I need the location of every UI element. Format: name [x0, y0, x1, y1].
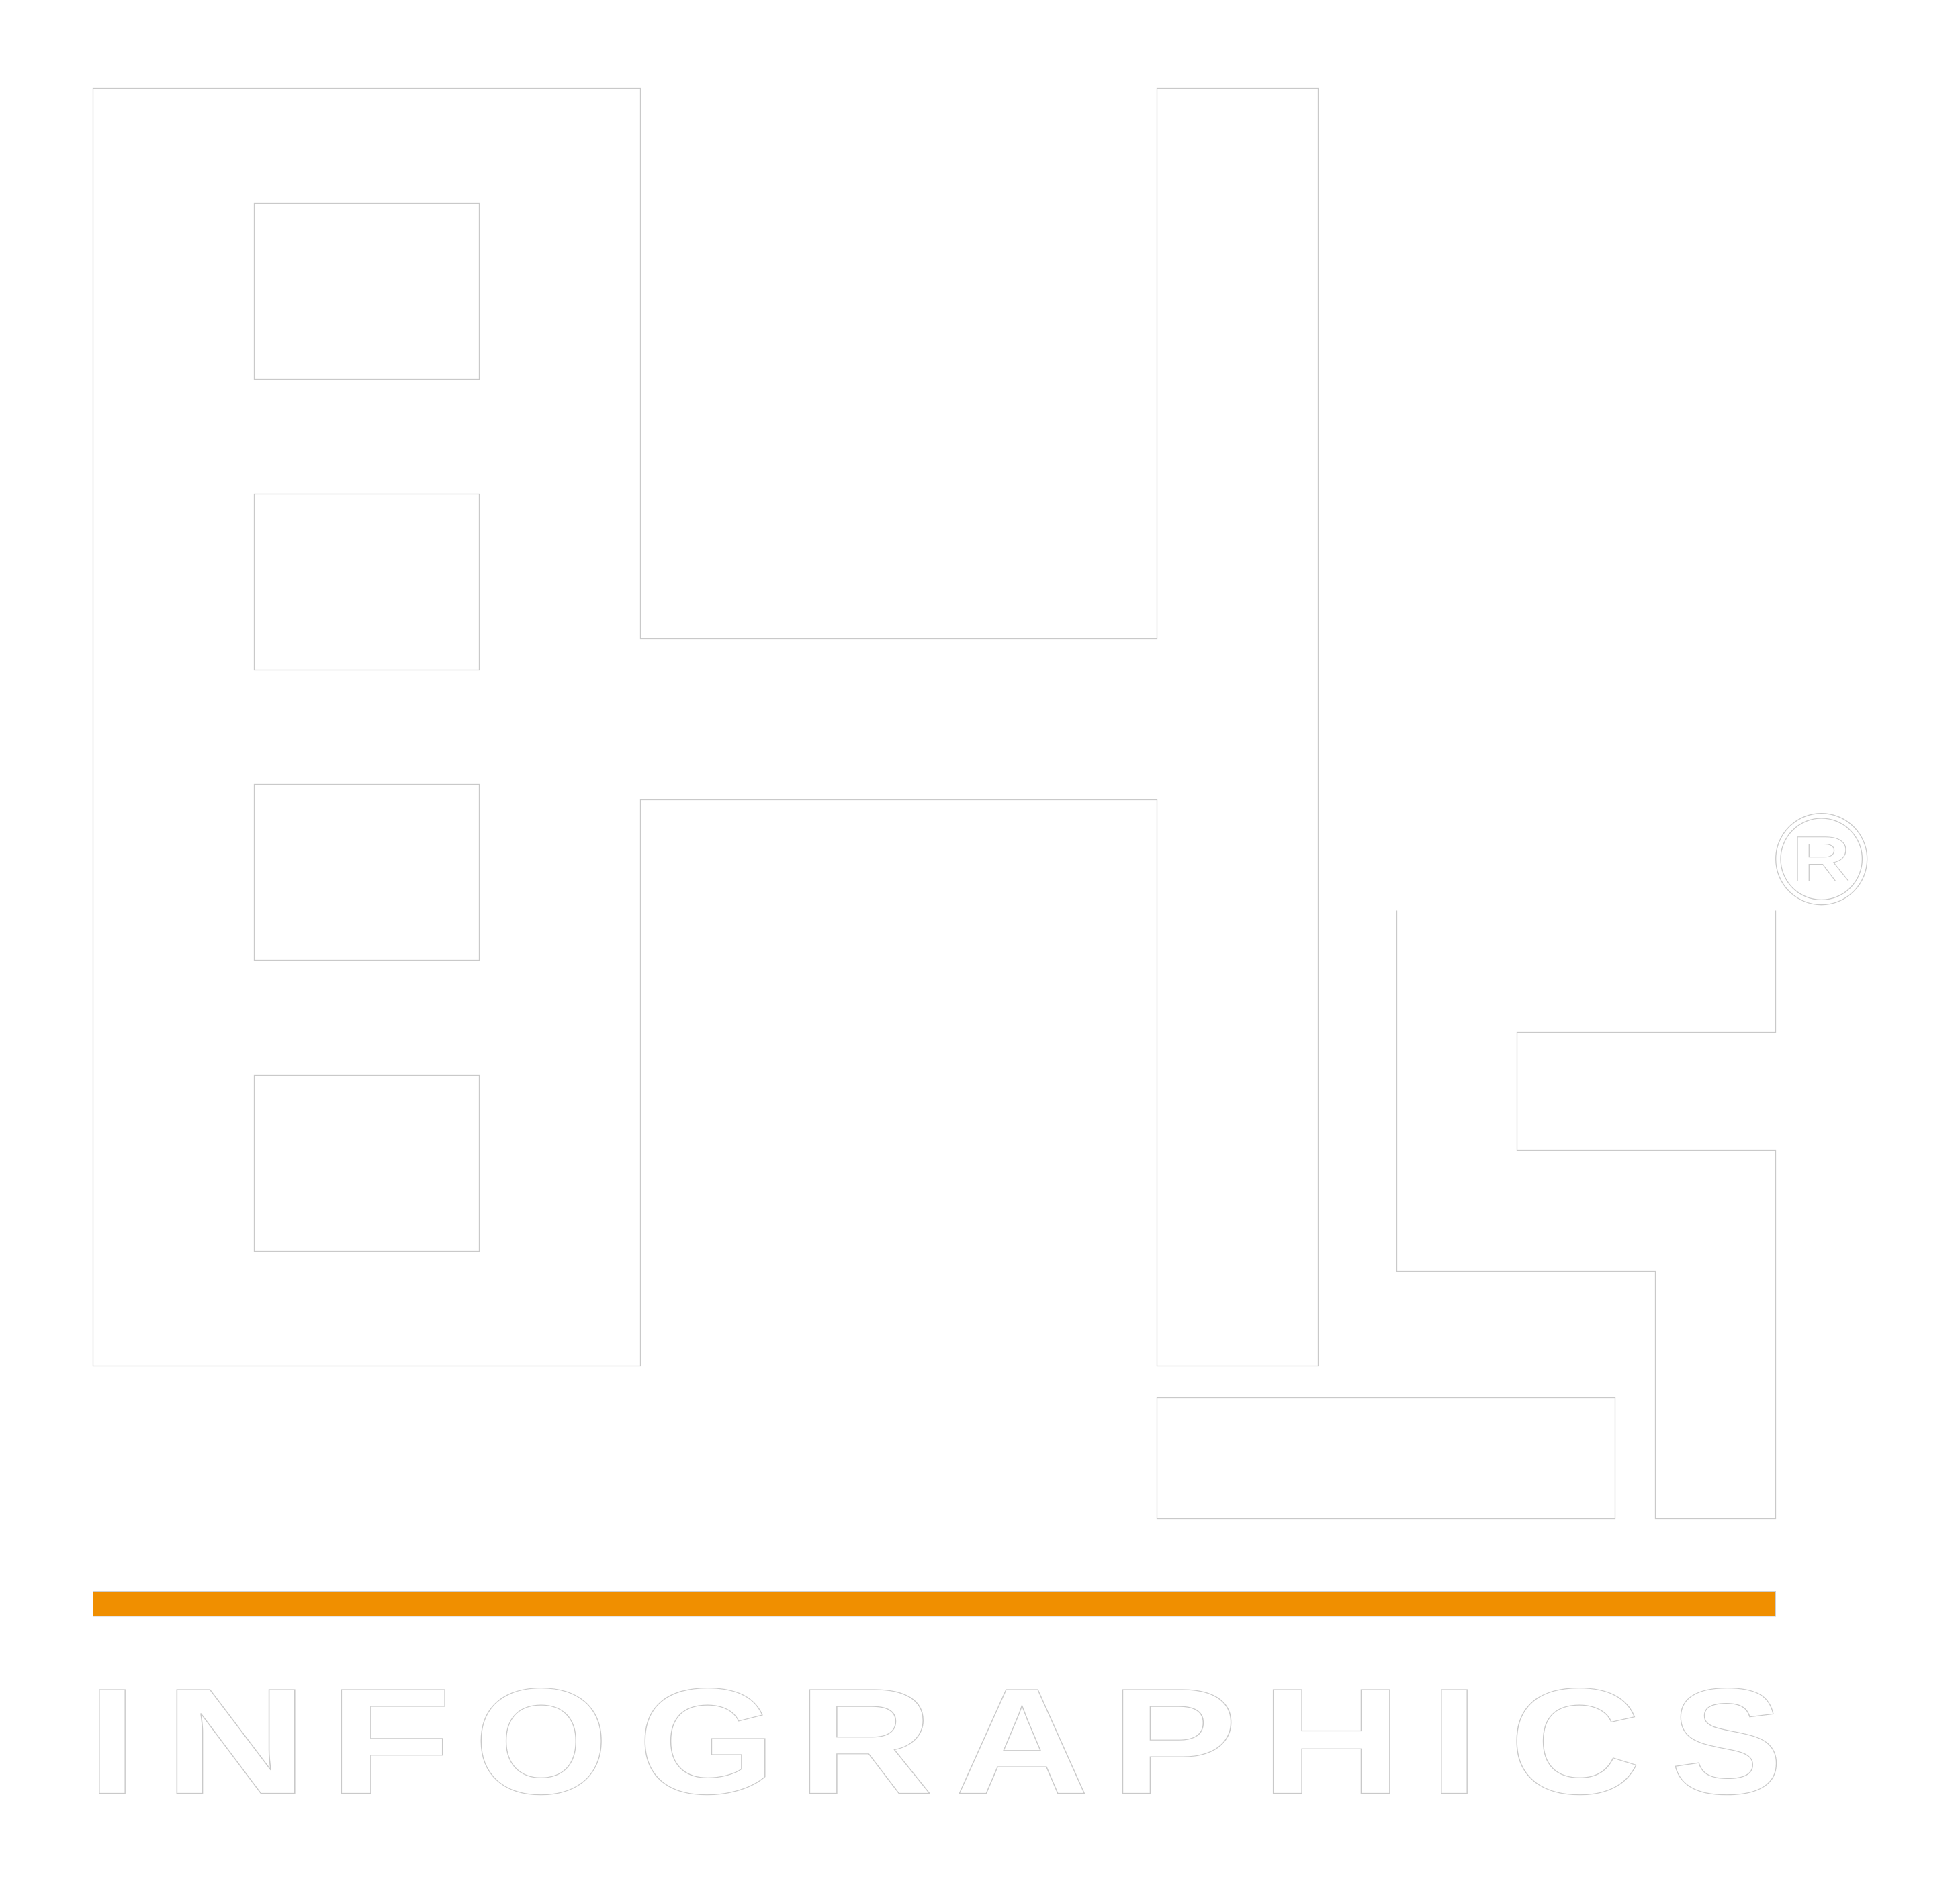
wordmark: INFOGRAPHICS: G — [637, 1657, 776, 1826]
registered mark — [1776, 814, 1867, 905]
wordmark: INFOGRAPHICS: N — [163, 1657, 308, 1826]
wordmark: INFOGRAPHICS: F — [328, 1657, 452, 1826]
wordmark: INFOGRAPHICS: R — [797, 1657, 934, 1826]
logo mark: monogram and registered symbol — [93, 89, 1867, 1518]
wordmark: INFOGRAPHICS: O — [474, 1657, 609, 1826]
wordmark: INFOGRAPHICS: A — [955, 1657, 1089, 1826]
letter S shape, open at top — [1397, 911, 1776, 1518]
orange divider bar — [93, 1592, 1776, 1616]
B window 2 — [254, 494, 480, 670]
wordmark: INFOGRAPHICS: I — [87, 1657, 137, 1826]
wordmark: INFOGRAPHICS: P — [1110, 1657, 1237, 1826]
letter B joined to H: outline — [93, 89, 1318, 1366]
wordmark: INFOGRAPHICS: S — [1671, 1657, 1783, 1826]
B window 3 — [254, 785, 480, 961]
wordmark: INFOGRAPHICS: H — [1260, 1657, 1403, 1826]
B window 1 — [254, 203, 480, 379]
wordmark: INFOGRAPHICS: C — [1509, 1657, 1641, 1826]
registered mark: letter R: R — [1792, 824, 1850, 895]
registered mark: outer ring — [1776, 814, 1867, 905]
B window 4 — [254, 1075, 480, 1251]
registered mark: inner ring — [1781, 818, 1862, 900]
underscore block below H — [1157, 1397, 1615, 1518]
wordmark: INFOGRAPHICS: I — [1429, 1657, 1479, 1826]
